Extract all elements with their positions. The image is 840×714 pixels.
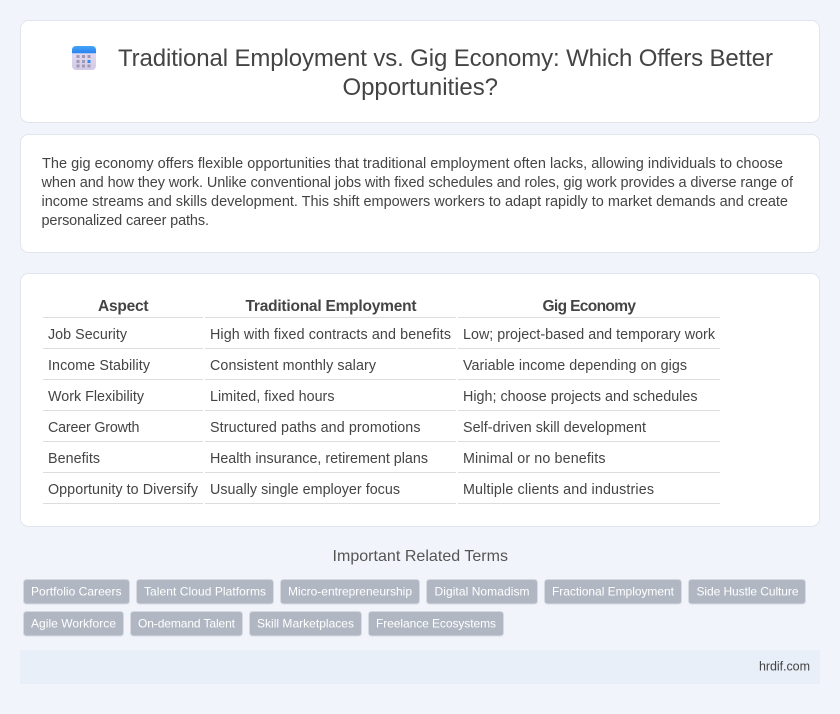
tag: micro-entrepreneurship: Micro-entrepreneurship [288, 584, 412, 598]
tag: talent cloud platforms: Talent Cloud Platforms [144, 584, 266, 598]
tags [24, 580, 806, 636]
row: opportunity to diversify: Multiple clients and industries [463, 482, 654, 498]
row: work flexibility: High; choose projects and schedules [463, 389, 698, 405]
intro paragraph: income streams and skills development. This shift empowers workers to adapt rapidly to market demands and create [42, 194, 788, 210]
intro paragraph: personalized career paths. [42, 213, 209, 229]
tag: agile workforce: Agile Workforce [31, 616, 116, 630]
row: work flexibility: Limited, fixed hours [210, 389, 334, 405]
title [118, 45, 773, 101]
panel: introduction [20, 134, 820, 252]
row: income stability [48, 358, 687, 374]
intro paragraph [40, 156, 794, 229]
tag: skill marketplaces [250, 612, 362, 636]
table header: Traditional Employment [246, 298, 416, 315]
row: income stability: Income Stability [48, 358, 151, 374]
row: job security: Low; project-based and temporary work [463, 327, 716, 343]
tag: freelance ecosystems [368, 612, 504, 636]
table header: Gig Economy [542, 298, 636, 315]
tag: digital nomadism [426, 580, 538, 604]
heading: important related terms: Important Related Terms [332, 548, 508, 565]
tag: talent cloud platforms [136, 580, 274, 604]
tag: side hustle culture [688, 580, 806, 604]
title: Opportunities? [342, 74, 498, 101]
row: benefits: Minimal or no benefits [463, 451, 606, 467]
row: benefits [48, 451, 606, 467]
row: career growth: Structured paths and promotions [210, 420, 420, 436]
tag: fractional employment [544, 580, 682, 604]
tag: on-demand talent [130, 612, 242, 636]
row: career growth [48, 420, 646, 436]
row: work flexibility [48, 389, 698, 405]
tag: portfolio careers: Portfolio Careers [31, 584, 122, 598]
tag: skill marketplaces: Skill Marketplaces [257, 616, 354, 630]
row: income stability: Consistent monthly salary [210, 358, 377, 374]
tag: digital nomadism: Digital Nomadism [434, 584, 530, 598]
row: job security: Job Security [48, 327, 128, 343]
footer [20, 650, 820, 684]
intro paragraph: The gig economy offers flexible opportunities that traditional employment often lacks, allowing individuals to choose [42, 156, 783, 172]
tag: freelance ecosystems: Freelance Ecosystems [376, 616, 496, 630]
row: benefits: Benefits [48, 451, 100, 467]
panel: title [20, 20, 820, 122]
tag: portfolio careers [24, 580, 130, 604]
table header: Aspect [98, 298, 148, 315]
icon: calendar [72, 46, 96, 70]
panel: comparison table [20, 274, 820, 526]
tag: fractional employment: Fractional Employment [552, 584, 675, 598]
row: opportunity to diversify: Usually single employer focus [210, 482, 400, 498]
row: income stability: Variable income depending on gigs [463, 358, 687, 374]
title: Traditional Employment vs. Gig Economy: Which Offers Better [118, 45, 773, 72]
row: opportunity to diversify: Opportunity to Diversify [48, 482, 199, 498]
row: opportunity to diversify [48, 482, 654, 498]
row: benefits: Health insurance, retirement plans [210, 451, 428, 467]
footer source: hrdif.com [759, 660, 810, 674]
table header [98, 298, 636, 315]
row: career growth: Career Growth [48, 420, 140, 436]
row: work flexibility: Work Flexibility [48, 389, 145, 405]
row: job security: High with fixed contracts and benefits [210, 327, 451, 343]
tag: micro-entrepreneurship [280, 580, 420, 604]
intro paragraph: when and how they work. Unlike conventional jobs with fixed schedules and roles, gig work provides a diverse range of [40, 175, 794, 191]
tag: on-demand talent: On-demand Talent [138, 616, 236, 630]
tag: agile workforce [24, 612, 124, 636]
row: job security [48, 327, 716, 343]
tag: side hustle culture: Side Hustle Culture [696, 584, 799, 598]
row: career growth: Self-driven skill development [463, 420, 646, 436]
